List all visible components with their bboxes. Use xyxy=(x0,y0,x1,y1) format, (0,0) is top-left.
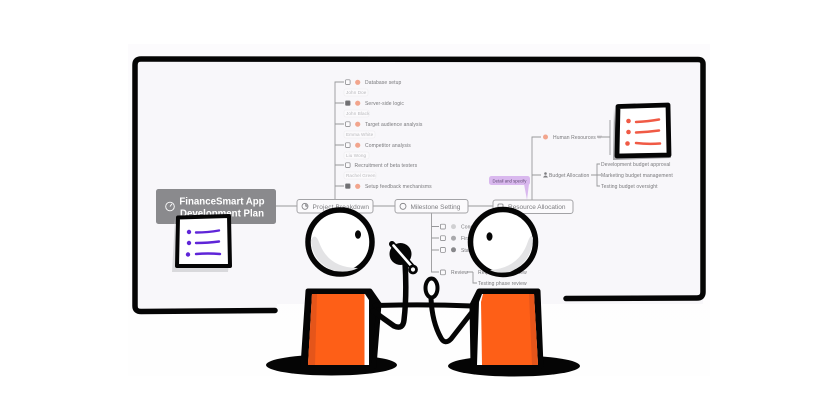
node: project breakdown xyxy=(297,200,373,213)
right body xyxy=(472,291,541,366)
central topic: FinanceSmart App xyxy=(179,196,265,208)
branch: project breakdown tasks: Target audience analysis xyxy=(365,122,423,128)
branch: resource allocation xyxy=(543,134,673,190)
branch: project breakdown tasks: Rachel Green xyxy=(346,173,376,178)
branch: resource allocation: Development budget approval xyxy=(601,162,670,168)
branch: project breakdown tasks: Emma White xyxy=(346,132,374,137)
branch: resource allocation: Human Resources xyxy=(553,135,596,141)
node: milestone setting: Milestone Setting xyxy=(410,204,461,211)
shadow ellipse right xyxy=(448,356,580,376)
sticky note: red list xyxy=(613,105,671,160)
arms xyxy=(373,262,472,342)
node: resource allocation: Resource Allocation xyxy=(508,204,566,211)
branch: project breakdown tasks: John Doe xyxy=(346,90,367,95)
hand holding pen xyxy=(390,243,416,273)
branch: resource allocation: Testing budget oversight xyxy=(601,184,658,190)
shaking arms line xyxy=(375,305,472,306)
right arm with raised finger xyxy=(431,298,472,342)
left body xyxy=(303,291,379,366)
branch: project breakdown tasks: Database setup xyxy=(365,80,402,86)
branch: project breakdown tasks xyxy=(344,80,432,190)
raised hand xyxy=(426,278,438,298)
branch: resource allocation: Marketing budget management xyxy=(601,173,673,179)
right head xyxy=(470,210,536,274)
left arm with pen xyxy=(373,262,406,327)
left head xyxy=(308,210,372,274)
shadow ellipse left xyxy=(266,354,397,376)
branch: project breakdown tasks: Competitor analysis xyxy=(365,143,411,149)
branch: milestone items: Review xyxy=(451,270,468,276)
branch: milestone items: First prototype release xyxy=(461,236,513,242)
branch: project breakdown tasks: John Black xyxy=(346,111,370,116)
node: resource allocation xyxy=(493,200,573,214)
right person xyxy=(448,210,580,376)
comment tag: Detail and specify xyxy=(493,178,527,183)
branch: milestone items xyxy=(440,224,527,287)
central topic xyxy=(156,189,276,224)
branch: project breakdown tasks: Recruitment of beta testers xyxy=(354,163,418,169)
branch: project breakdown tasks: Server-side logic xyxy=(365,101,404,107)
branch: milestone items: Requirements review xyxy=(478,270,527,276)
branch: project breakdown tasks: Liu Wong xyxy=(346,153,366,158)
branch: project breakdown tasks: Setup feedback mechanisms xyxy=(365,184,432,190)
mind map xyxy=(156,80,673,287)
central topic: Development Plan xyxy=(180,208,264,220)
branch: milestone items: Testing phase review xyxy=(478,281,527,287)
comment tag xyxy=(489,176,530,200)
branch: resource allocation: Budget Allocation xyxy=(549,173,589,179)
branch: milestone items: Concept design sign-off xyxy=(461,224,516,230)
node: project breakdown: Project Breakdown xyxy=(312,204,369,211)
left person xyxy=(266,210,397,376)
whiteboard xyxy=(135,59,703,312)
node: milestone setting xyxy=(395,200,468,213)
sticky note: purple list xyxy=(172,216,230,272)
branch: milestone items: Stakeholder approval xyxy=(461,248,510,254)
